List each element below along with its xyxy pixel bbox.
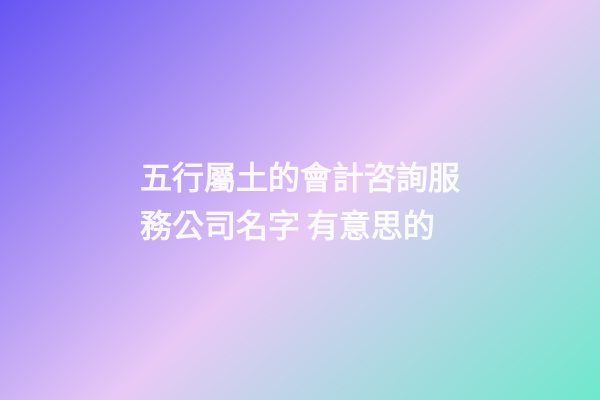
title bbox=[140, 160, 460, 244]
title: 五行屬土的會計咨詢服 bbox=[140, 160, 460, 196]
title: 務公司名字 有意思的 bbox=[140, 208, 435, 244]
